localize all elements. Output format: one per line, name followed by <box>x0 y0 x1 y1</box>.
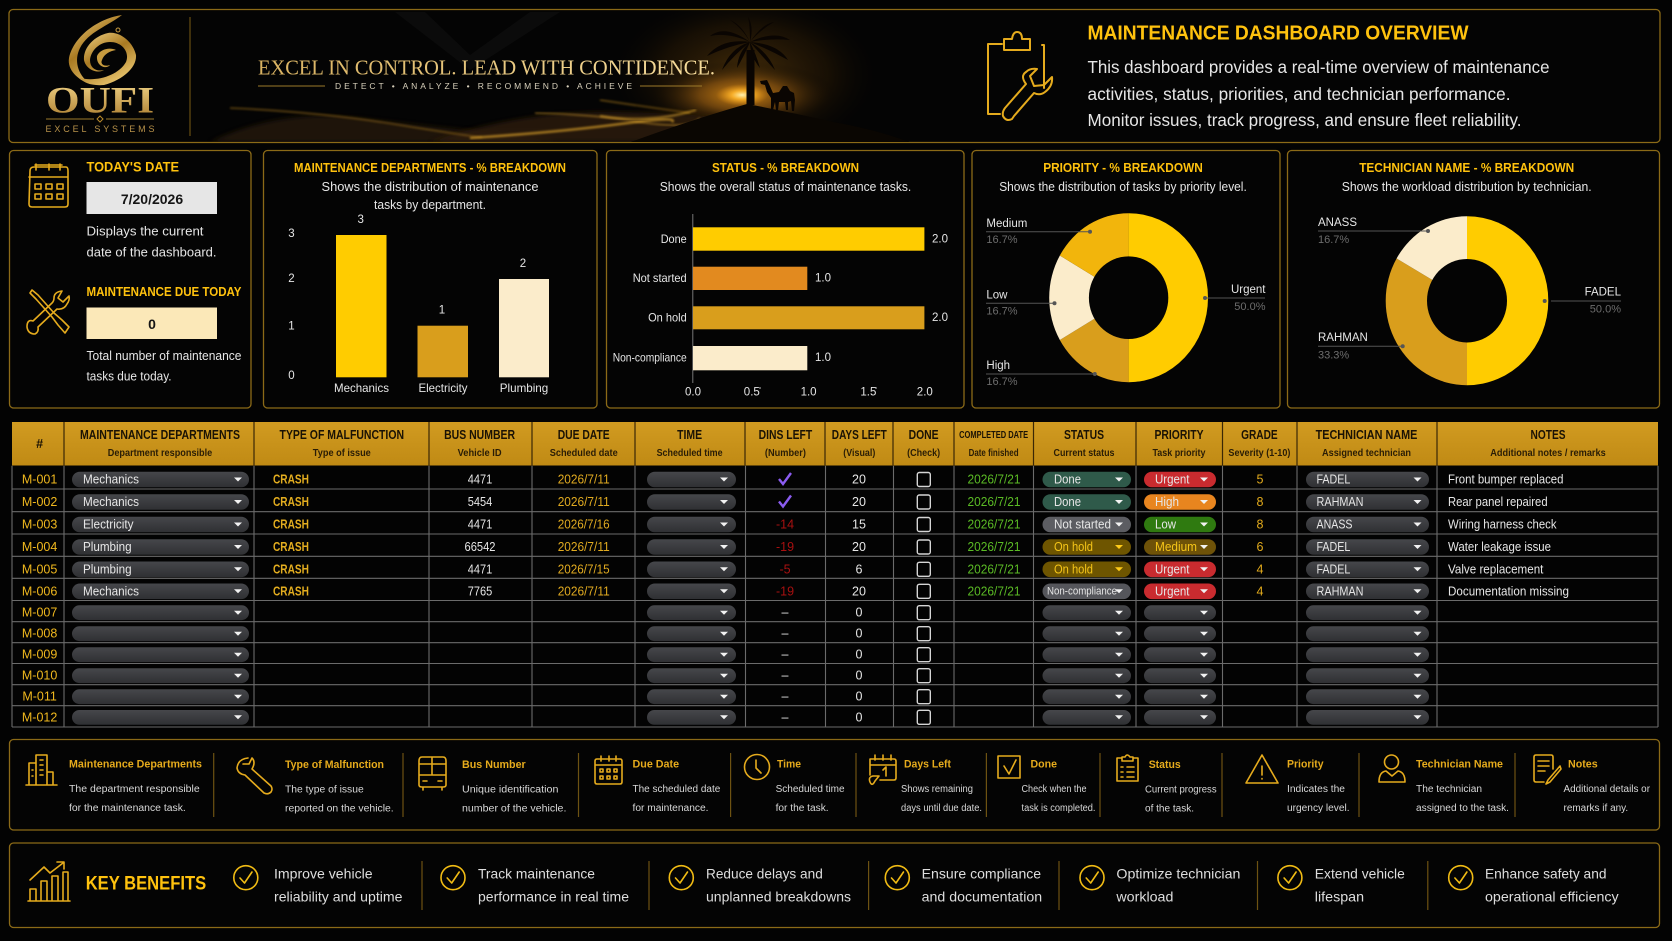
bar chart: departments: 3 <box>288 228 295 240</box>
table header: BUS NUMBER <box>444 428 515 442</box>
row M-002 <box>22 494 1548 510</box>
slogan: EXCEL IN CONTROL. LEAD WITH CONTIDENCE. <box>258 56 715 80</box>
legend: technician name <box>1379 755 1509 814</box>
row M-003: ANASS <box>1316 518 1352 532</box>
row M-001: Mechanics <box>83 472 139 486</box>
row M-005: Urgent <box>1155 562 1190 576</box>
row M-003: 2026/7/21 <box>968 518 1021 532</box>
panel: today's date and maintenance due <box>10 150 251 408</box>
chart description: Shows the overall status of maintenance tasks. <box>660 180 911 194</box>
overview text: activities, status, priorities, and technician performance. <box>1088 84 1510 104</box>
row M-005: 4471 <box>468 562 492 576</box>
legend: due date: Due Date <box>632 758 679 770</box>
row M-004 <box>22 539 1551 555</box>
slogan: DETECT • ANALYZE • RECOMMEND • ACHIEVE <box>335 81 632 91</box>
donut chart: technician <box>1318 216 1622 385</box>
today's date <box>86 160 217 260</box>
row M-009: 0 <box>856 648 863 662</box>
row M-009 <box>22 647 1429 662</box>
row M-008: – <box>782 627 789 641</box>
row M-012: 0 <box>856 710 863 724</box>
row M-005: Plumbing <box>83 562 132 576</box>
bar chart: departments: Mechanics <box>334 381 389 395</box>
row M-005: Valve replacement <box>1448 562 1544 576</box>
row M-002: M-002 <box>22 495 57 509</box>
benefit: lifespan: Extend vehicle <box>1315 865 1405 881</box>
panel: maintenance departments bar chart <box>264 150 597 408</box>
legend: notes: remarks if any. <box>1564 803 1628 814</box>
legend: time: for the task. <box>776 803 829 814</box>
bar chart: departments: 2 <box>520 258 526 270</box>
donut chart: priority: High <box>986 360 1010 372</box>
row M-004: Medium <box>1155 540 1197 554</box>
panel: priority donut <box>972 150 1280 408</box>
legend: bus number: number of the vehicle. <box>462 804 566 814</box>
row M-002: Done <box>1054 495 1081 509</box>
panel: header banner <box>8 8 1661 144</box>
table header: DAYS LEFT <box>832 428 887 442</box>
row M-002: Mechanics <box>83 495 139 509</box>
today's date: Displays the current <box>86 224 204 238</box>
row M-005: 2026/7/15 <box>558 562 610 576</box>
row M-012 <box>22 710 1429 725</box>
row M-003: Wiring harness check <box>1448 518 1557 532</box>
legend: days left: days until due date. <box>901 803 982 814</box>
bar chart: departments: Electricity <box>418 381 468 395</box>
row M-003: 8 <box>1257 518 1264 532</box>
benefit: compliance: and documentation <box>922 889 1042 905</box>
legend: notes <box>1534 755 1651 814</box>
bar chart: departments: 0 <box>288 370 295 382</box>
row M-002: 2026/7/11 <box>558 495 610 509</box>
legend: done: Check when the <box>1022 784 1087 795</box>
row M-007 <box>22 605 1429 620</box>
row M-005: -5 <box>779 562 791 576</box>
bar chart: departments: 1 <box>439 304 445 316</box>
row M-012: – <box>782 710 789 724</box>
bar chart: departments: 2 <box>288 273 295 285</box>
table header: MAINTENANCE DEPARTMENTS <box>80 428 240 442</box>
row M-004: Plumbing <box>83 540 132 554</box>
slogan <box>258 56 715 91</box>
row M-009: M-009 <box>22 648 57 662</box>
row M-002: 20 <box>852 495 866 509</box>
legend: due date: for maintenance. <box>632 803 708 814</box>
row M-008: M-008 <box>22 627 57 641</box>
horizontal bar chart: status: Non-compliance <box>613 351 687 365</box>
benefit: reduce delays <box>669 865 851 905</box>
overview text: This dashboard provides a real-time overview of maintenance <box>1088 57 1550 77</box>
table header: Vehicle ID <box>458 447 502 459</box>
legend: done <box>998 756 1096 814</box>
row M-005: CRASH <box>273 562 309 576</box>
table header: Severity (1-10) <box>1228 447 1290 459</box>
table header: Department responsible <box>108 447 212 459</box>
table header: DUE DATE <box>558 428 610 442</box>
row M-002: 5454 <box>468 495 492 509</box>
legend: maintenance departments <box>26 755 202 814</box>
chart description: Shows the distribution of tasks by priority level. <box>999 180 1247 194</box>
row M-002: CRASH <box>273 495 309 509</box>
horizontal bar chart: status: On hold <box>648 311 687 325</box>
logo: OUFI Excel Systems <box>46 15 154 134</box>
legend: due date: The scheduled date <box>632 784 721 795</box>
row M-003: 2026/7/16 <box>558 518 610 532</box>
benefit: reliability <box>234 865 403 905</box>
benefit: reduce delays: unplanned breakdowns <box>706 889 851 905</box>
table header: Task priority <box>1152 447 1206 459</box>
benefit: workload <box>1080 865 1240 905</box>
donut chart: technician: FADEL <box>1585 287 1622 299</box>
legend: days left: Shows remaining <box>901 784 973 795</box>
legend: status <box>1117 755 1217 814</box>
horizontal bar chart: status: 1.0 <box>815 352 831 364</box>
legend: maintenance departments: Maintenance Departments <box>69 758 202 770</box>
legend: priority <box>1246 755 1350 814</box>
row M-008 <box>22 626 1429 641</box>
row M-006: 4 <box>1257 584 1264 598</box>
horizontal bar chart: status: Not started <box>633 271 687 285</box>
panel: status bar chart <box>606 150 964 408</box>
chart title: TECHNICIAN NAME - % BREAKDOWN <box>1359 160 1574 175</box>
row M-006: Urgent <box>1155 584 1190 598</box>
benefit: tracking: performance in real time <box>478 889 629 905</box>
row M-001: Done <box>1054 472 1081 486</box>
benefit: safety <box>1449 865 1619 905</box>
row M-005 <box>22 562 1544 577</box>
row M-010 <box>22 668 1429 683</box>
donut chart: priority <box>986 213 1266 388</box>
row M-004: 2026/7/21 <box>968 540 1021 554</box>
table header: Assigned technician <box>1322 447 1411 459</box>
row M-006: Documentation missing <box>1448 584 1569 598</box>
row M-006: Non-compliance <box>1047 585 1117 597</box>
row M-001: 2026/7/11 <box>558 472 610 486</box>
row M-006: RAHMAN <box>1316 584 1364 598</box>
legend: technician name: Technician Name <box>1416 758 1503 770</box>
row M-011: M-011 <box>22 690 57 704</box>
row M-005: On hold <box>1054 562 1093 576</box>
logo: OUFI Excel Systems: OUFI <box>46 80 154 122</box>
row M-003 <box>22 517 1557 532</box>
table header: GRADE <box>1241 428 1278 442</box>
benefit: reliability: Improve vehicle <box>274 865 373 881</box>
chart description <box>322 180 539 212</box>
legend: type of malfunction: reported on the vehicle. <box>285 804 394 814</box>
overview text: Monitor issues, track progress, and ensure fleet reliability. <box>1088 110 1522 130</box>
today's date: date of the dashboard. <box>86 244 216 260</box>
donut chart: priority: 16.7% <box>986 234 1018 246</box>
horizontal bar chart: status: 1.5 <box>860 386 876 398</box>
today's date: TODAY'S DATE <box>86 160 179 174</box>
chart description: tasks by department. <box>374 198 486 212</box>
row M-007: M-007 <box>22 606 57 620</box>
horizontal bar chart: status: 0.5 <box>744 386 760 398</box>
chart description: Shows the distribution of maintenance <box>322 180 539 194</box>
row M-002: Rear panel repaired <box>1448 495 1548 509</box>
horizontal bar chart: status: 2.0 <box>932 312 948 324</box>
panel: technician donut <box>1288 150 1660 408</box>
legend: priority: Priority <box>1287 758 1324 770</box>
row M-003: M-003 <box>22 518 57 532</box>
row M-011: 0 <box>856 690 863 704</box>
horizontal bar chart: status <box>613 214 948 398</box>
row M-006: 20 <box>852 584 866 598</box>
panel: column legend <box>10 740 1660 830</box>
table header: PRIORITY <box>1154 428 1204 442</box>
row M-006: M-006 <box>22 584 57 598</box>
table header: (Check) <box>907 447 940 459</box>
row M-004: On hold <box>1054 540 1093 554</box>
donut chart: priority: Medium <box>986 218 1027 230</box>
row M-010: – <box>782 669 789 683</box>
table header <box>12 422 1658 466</box>
donut chart: technician: 50.0% <box>1590 304 1621 316</box>
row M-001: Front bumper replaced <box>1448 472 1564 486</box>
row M-006: Mechanics <box>83 584 139 598</box>
maintenance due today: Total number of maintenance <box>86 349 242 363</box>
row M-005: 6 <box>856 562 863 576</box>
overview text: MAINTENANCE DASHBOARD OVERVIEW <box>1088 22 1469 44</box>
benefit: compliance <box>885 865 1042 905</box>
table header: (Number) <box>765 447 806 459</box>
row M-001: M-001 <box>22 472 57 486</box>
donut chart: technician: 16.7% <box>1318 234 1349 246</box>
benefit: reliability: reliability and uptime <box>274 889 403 905</box>
donut chart: priority: 50.0% <box>1234 301 1266 313</box>
legend: done: task is completed. <box>1022 803 1096 814</box>
maintenance due today: MAINTENANCE DUE TODAY <box>86 284 242 299</box>
row M-002: 8 <box>1257 495 1264 509</box>
row M-004: M-004 <box>22 540 57 554</box>
chart title: PRIORITY - % BREAKDOWN <box>1043 160 1203 175</box>
legend: time: Time <box>777 758 801 770</box>
table header: Type of issue <box>313 447 371 459</box>
legend: technician name: The technician <box>1416 784 1482 795</box>
table header: Additional notes / remarks <box>1490 447 1606 459</box>
row M-006 <box>22 584 1569 599</box>
row M-004: -19 <box>776 540 794 554</box>
banner artwork: desert with palm and camel <box>214 13 909 142</box>
chart title: STATUS - % BREAKDOWN <box>712 160 859 175</box>
icon: clipboard with wrench <box>988 32 1052 120</box>
row M-003: 4471 <box>468 518 492 532</box>
legend: status: Current progress <box>1145 784 1217 796</box>
row M-002: High <box>1155 495 1179 509</box>
row M-006: 7765 <box>468 584 492 598</box>
row M-003: Not started <box>1054 518 1111 532</box>
row M-006: CRASH <box>273 584 309 598</box>
maintenance due today <box>86 284 242 384</box>
row M-001: Urgent <box>1155 472 1190 486</box>
legend: status: Status <box>1149 759 1181 771</box>
horizontal bar chart: status: 0.0 <box>685 386 701 398</box>
benefit: compliance: Ensure compliance <box>922 865 1041 881</box>
row M-006: -19 <box>776 584 794 598</box>
benefit: reduce delays: Reduce delays and <box>706 865 823 881</box>
icon: crossed tools <box>27 290 69 334</box>
legend: bus number: Bus Number <box>462 759 526 771</box>
row M-001 <box>22 472 1564 487</box>
benefit: workload: workload <box>1115 889 1173 905</box>
legend: notes: Additional details or <box>1564 784 1651 795</box>
table header: TYPE OF MALFUNCTION <box>280 428 404 442</box>
row M-002: 2026/7/21 <box>968 495 1021 509</box>
maintenance due today: tasks due today. <box>86 370 172 384</box>
table: maintenance log <box>12 422 1658 727</box>
horizontal bar chart: status: Done <box>661 232 687 246</box>
horizontal bar chart: status: 2.0 <box>917 386 933 398</box>
row M-004: 20 <box>852 540 866 554</box>
donut chart: technician: 33.3% <box>1318 349 1349 361</box>
maintenance due today: 0 <box>148 316 156 332</box>
horizontal bar chart: status: 1.0 <box>815 272 831 284</box>
table header: DINS LEFT <box>759 428 812 442</box>
benefit: lifespan: lifespan <box>1315 889 1364 905</box>
table header: COMPLETED DATE <box>959 429 1028 441</box>
legend: due date <box>595 756 721 814</box>
overview text <box>1088 22 1550 130</box>
legend: time: Scheduled time <box>776 784 845 795</box>
row M-010: 0 <box>856 669 863 683</box>
benefit: workload: Optimize technician <box>1116 865 1240 881</box>
legend: notes: Notes <box>1568 758 1598 770</box>
benefit: safety: Enhance safety and <box>1485 865 1606 881</box>
chart title: MAINTENANCE DEPARTMENTS - % BREAKDOWN <box>294 160 566 175</box>
table header: NOTES <box>1530 428 1566 442</box>
benefit: tracking: Track maintenance <box>478 865 595 881</box>
row M-004: CRASH <box>273 540 309 554</box>
row M-004: Water leakage issue <box>1448 540 1551 554</box>
benefit: lifespan <box>1278 865 1405 905</box>
table header: STATUS <box>1064 428 1104 442</box>
icon: calendar <box>29 164 68 207</box>
row M-009: – <box>782 648 789 662</box>
donut chart: priority: Low <box>986 290 1008 302</box>
row M-005: M-005 <box>22 562 57 576</box>
row M-004: FADEL <box>1316 540 1350 554</box>
legend: bus number <box>419 757 566 814</box>
row M-001: FADEL <box>1316 472 1350 486</box>
row M-004: 6 <box>1257 540 1264 554</box>
row M-003: -14 <box>776 518 794 532</box>
legend: days left <box>869 755 982 814</box>
row M-005: 2026/7/21 <box>968 562 1021 576</box>
row M-010: M-010 <box>22 669 57 683</box>
table header: Scheduled date <box>550 447 618 459</box>
legend: type of malfunction: Type of Malfunction <box>285 759 384 771</box>
table header: TIME <box>677 428 702 442</box>
panel: key benefits <box>10 843 1660 928</box>
legend: status: of the task. <box>1145 804 1194 814</box>
row M-006: 2026/7/21 <box>968 584 1021 598</box>
key benefits heading: KEY BENEFITS <box>86 874 206 894</box>
donut chart: technician: RAHMAN <box>1318 332 1368 344</box>
donut chart: priority: 16.7% <box>986 306 1018 318</box>
horizontal bar chart: status: 2.0 <box>932 234 948 246</box>
row M-011 <box>22 689 1429 704</box>
row M-003: Low <box>1155 518 1177 532</box>
icon: growth chart <box>28 862 70 901</box>
donut chart: priority: Urgent <box>1231 284 1266 296</box>
row M-007: 0 <box>856 606 863 620</box>
benefit: tracking <box>441 865 629 905</box>
legend: type of malfunction: The type of issue <box>285 784 364 796</box>
table header: Date finished <box>969 447 1019 459</box>
row M-003: CRASH <box>273 518 309 532</box>
row M-001: 4471 <box>468 472 492 486</box>
row M-004: 66542 <box>464 540 496 554</box>
legend: priority: Indicates the <box>1287 784 1345 795</box>
table header: Current status <box>1054 447 1115 459</box>
horizontal bar chart: status: 1.0 <box>801 386 817 398</box>
row M-005: 4 <box>1257 562 1264 576</box>
row M-011: – <box>782 690 789 704</box>
today's date: 7/20/2026 <box>121 191 183 207</box>
row M-002: RAHMAN <box>1316 495 1364 509</box>
row M-003: 15 <box>852 518 866 532</box>
legend: done: Done <box>1030 758 1057 770</box>
logo: OUFI Excel Systems: EXCEL SYSTEMS <box>46 124 154 134</box>
bar chart: departments: Plumbing <box>500 381 548 395</box>
table header: # <box>36 437 43 451</box>
row M-001: CRASH <box>273 472 309 486</box>
table header: (Visual) <box>843 447 875 459</box>
legend: maintenance departments: for the maintenance task. <box>69 803 186 814</box>
benefit: safety: operational efficiency <box>1485 889 1619 905</box>
row M-001: 2026/7/21 <box>968 472 1021 486</box>
legend: days left: Days Left <box>904 758 951 770</box>
row M-004: 2026/7/11 <box>558 540 610 554</box>
legend: bus number: Unique identification <box>462 784 558 796</box>
legend: maintenance departments: The department responsible <box>69 784 200 795</box>
donut chart: priority: 16.7% <box>986 376 1018 388</box>
row M-001: 5 <box>1257 472 1264 486</box>
row M-007: – <box>782 606 789 620</box>
donut chart: technician: ANASS <box>1318 217 1357 229</box>
row M-001: 20 <box>852 472 866 486</box>
bar chart: departments: 3 <box>357 214 364 226</box>
row M-006: 2026/7/11 <box>558 584 610 598</box>
table header: Scheduled time <box>657 447 723 459</box>
row M-003: Electricity <box>83 518 134 532</box>
table header: DONE <box>909 428 939 442</box>
row M-008: 0 <box>856 627 863 641</box>
bar chart: departments: 1 <box>288 320 295 332</box>
bar chart: departments <box>288 214 549 395</box>
row M-005: FADEL <box>1316 562 1350 576</box>
row M-012: M-012 <box>22 710 57 724</box>
chart description: Shows the workload distribution by technician. <box>1342 180 1592 194</box>
table header: TECHNICIAN NAME <box>1316 428 1417 442</box>
legend: priority: urgency level. <box>1287 803 1350 814</box>
legend: time <box>744 754 845 814</box>
legend: technician name: assigned to the task. <box>1416 803 1509 814</box>
legend: type of malfunction <box>237 758 394 814</box>
